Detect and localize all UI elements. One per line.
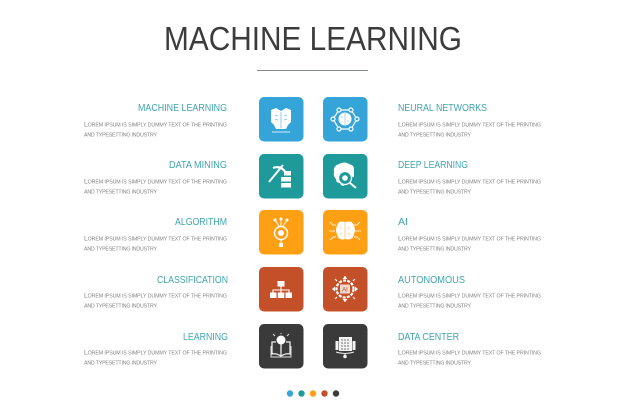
title: MACHINE LEARNING bbox=[164, 20, 462, 57]
right item: AI: LOREM IPSUM IS SIMPLY DUMMY TEXT OF THE PRINTING bbox=[398, 236, 541, 242]
left item: classification: CLASSIFICATION bbox=[157, 274, 228, 286]
left item: classification: LOREM IPSUM IS SIMPLY DUMMY TEXT OF THE PRINTING bbox=[84, 292, 227, 300]
right item: AI: AND TYPESETTING INDUSTRY bbox=[398, 246, 471, 252]
icon: autonomous gear and arrows: AI bbox=[342, 288, 348, 294]
icon: AI brain circuit bbox=[323, 210, 368, 254]
left item: machine learning: LOREM IPSUM IS SIMPLY DUMMY TEXT OF THE PRINTING bbox=[84, 122, 227, 128]
right item: deep learning: AND TYPESETTING INDUSTRY bbox=[398, 190, 471, 196]
right item: autonomous bbox=[398, 274, 541, 310]
left item: learning: LEARNING bbox=[183, 331, 228, 343]
left item: learning: LOREM IPSUM IS SIMPLY DUMMY TEXT OF THE PRINTING bbox=[84, 350, 227, 356]
left item: data mining bbox=[84, 159, 227, 196]
icon: learning book and bulb bbox=[259, 324, 304, 368]
right item: AI: AI bbox=[398, 216, 408, 228]
left item: data mining: DATA MINING bbox=[169, 159, 227, 171]
left item: machine learning: AND TYPESETTING INDUSTRY bbox=[84, 132, 157, 138]
pagination dots bbox=[287, 390, 339, 397]
icon: data center building bbox=[323, 324, 368, 368]
right item: autonomous: AUTONOMOUS bbox=[398, 274, 465, 286]
icon: machine learning book and head bbox=[259, 97, 304, 142]
left item: algorithm: AND TYPESETTING INDUSTRY bbox=[84, 246, 157, 252]
left item: algorithm bbox=[84, 216, 227, 252]
right item: data center: AND TYPESETTING INDUSTRY bbox=[398, 360, 471, 366]
right item: data center: LOREM IPSUM IS SIMPLY DUMMY TEXT OF THE PRINTING bbox=[398, 350, 541, 356]
left item: classification: AND TYPESETTING INDUSTRY bbox=[84, 304, 157, 310]
left item: data mining: AND TYPESETTING INDUSTRY bbox=[84, 190, 157, 196]
left item: data mining: LOREM IPSUM IS SIMPLY DUMMY TEXT OF THE PRINTING bbox=[84, 178, 227, 186]
left item: algorithm: LOREM IPSUM IS SIMPLY DUMMY TEXT OF THE PRINTING bbox=[84, 236, 227, 242]
left item: machine learning: MACHINE LEARNING bbox=[138, 102, 227, 114]
left item: learning bbox=[84, 331, 228, 366]
icon: data mining pickaxe and server bbox=[259, 154, 304, 198]
left item: learning: AND TYPESETTING INDUSTRY bbox=[84, 360, 157, 366]
title underline bbox=[257, 70, 368, 71]
right item: AI bbox=[398, 216, 541, 252]
right item: neural networks: LOREM IPSUM IS SIMPLY DUMMY TEXT OF THE PRINTING bbox=[398, 122, 541, 128]
right item: neural networks: AND TYPESETTING INDUSTRY bbox=[398, 132, 471, 138]
right item: data center bbox=[398, 331, 541, 366]
icon: neural network brain bbox=[323, 97, 368, 142]
icon: classification hierarchy bbox=[259, 267, 304, 312]
left item: algorithm: ALGORITHM bbox=[175, 216, 227, 228]
right item: neural networks: NEURAL NETWORKS bbox=[398, 102, 487, 114]
icon: algorithm nodes bbox=[259, 210, 304, 254]
icon: deep learning brain and magnifier bbox=[323, 154, 368, 198]
icon: autonomous gear and arrows bbox=[323, 267, 368, 312]
left item: classification bbox=[84, 274, 228, 310]
right item: neural networks bbox=[398, 102, 541, 138]
right item: deep learning: DEEP LEARNING bbox=[398, 159, 468, 171]
right item: data center: DATA CENTER bbox=[398, 331, 459, 343]
right item: deep learning bbox=[398, 159, 541, 196]
right item: autonomous: AND TYPESETTING INDUSTRY bbox=[398, 304, 471, 310]
right item: deep learning: LOREM IPSUM IS SIMPLY DUMMY TEXT OF THE PRINTING bbox=[398, 178, 541, 186]
left item: machine learning bbox=[84, 102, 227, 138]
right item: autonomous: LOREM IPSUM IS SIMPLY DUMMY TEXT OF THE PRINTING bbox=[398, 292, 541, 300]
